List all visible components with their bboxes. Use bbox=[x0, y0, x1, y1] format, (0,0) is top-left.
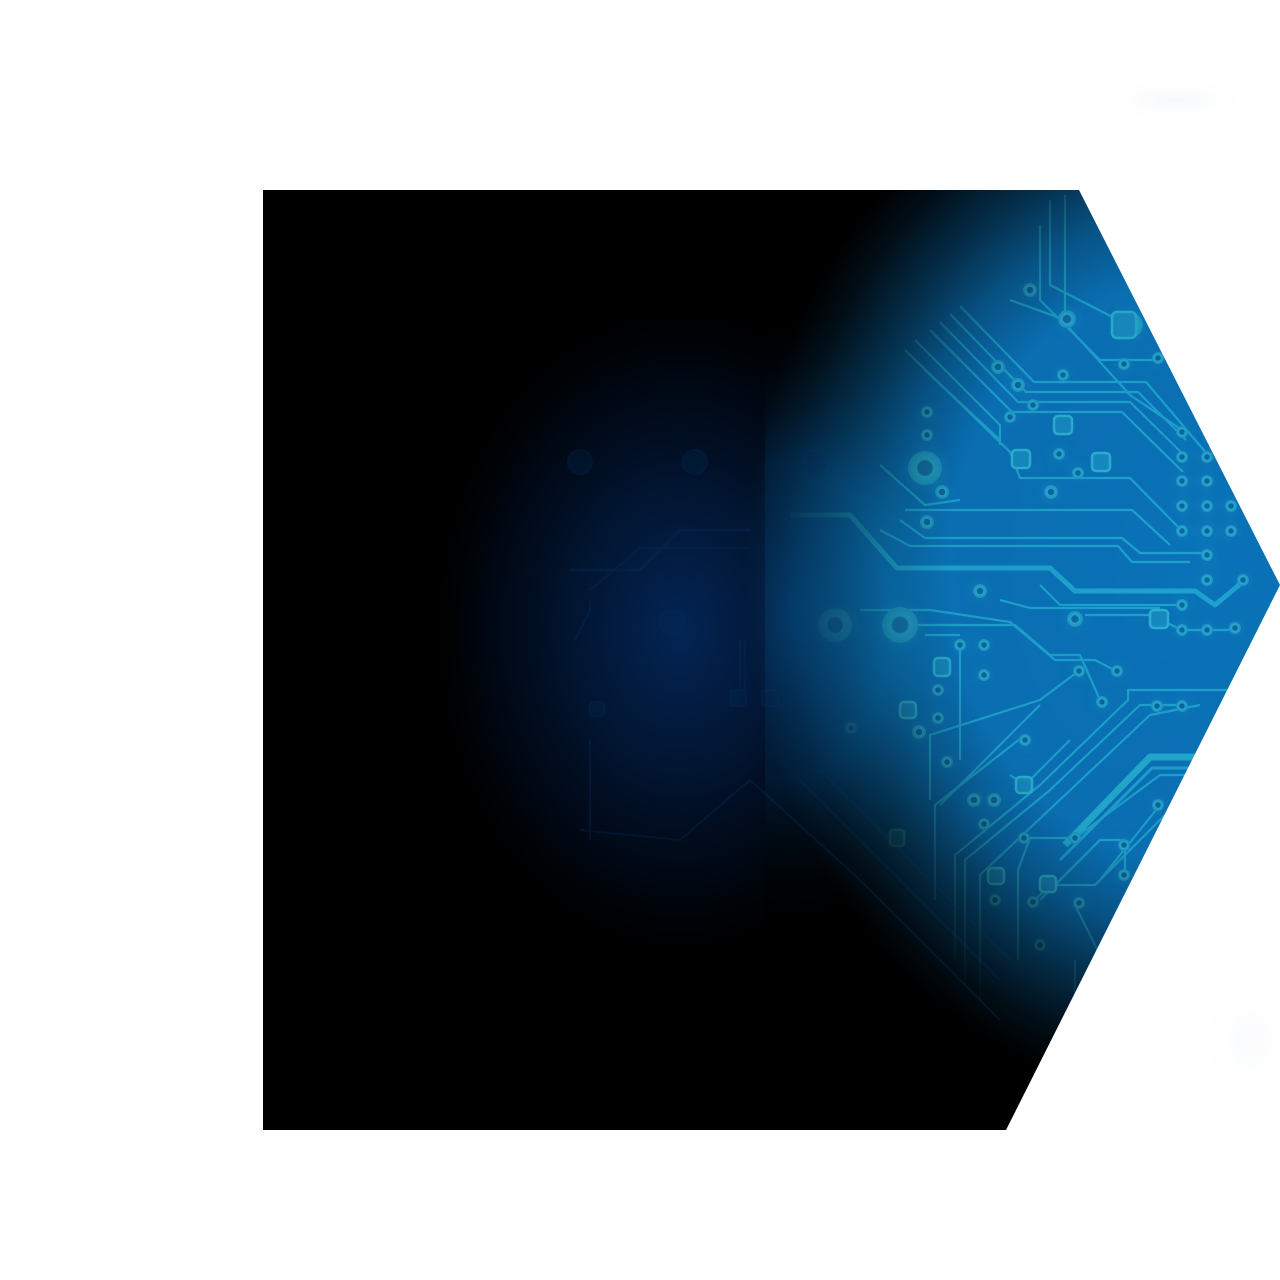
circuit round pads bbox=[818, 283, 1249, 951]
central faint blue glow bbox=[464, 347, 765, 914]
circuit traces bbox=[790, 195, 1245, 1000]
panel: hexagon arrow shape bbox=[263, 190, 1280, 1130]
right glow with hard left edge bbox=[765, 365, 924, 874]
pad halos bbox=[892, 315, 1138, 802]
faint circuit in dark area bbox=[568, 450, 1010, 1020]
smudge: bottom right haze bbox=[1190, 960, 1280, 1120]
circuit square pads bbox=[890, 312, 1168, 892]
graphic: circuit board panel bbox=[263, 98, 1280, 1130]
smudge: top right haze bbox=[1095, 74, 1255, 126]
dark vignette fade bbox=[263, 190, 1143, 1130]
